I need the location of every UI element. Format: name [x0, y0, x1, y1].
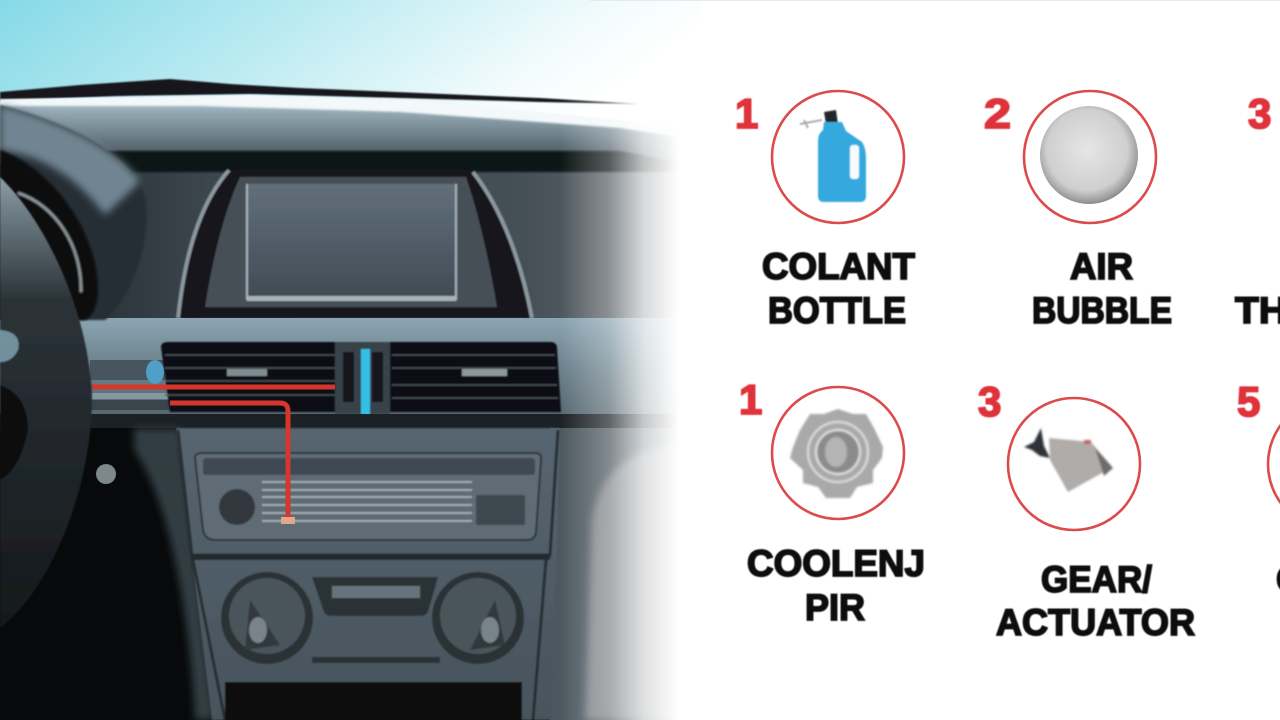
mode button	[476, 495, 525, 525]
item 6: clipped	[1237, 378, 1280, 600]
item 4: coolant pipe	[739, 376, 925, 628]
number 1: 1	[735, 90, 758, 137]
control panel	[195, 453, 541, 540]
label: COLANT	[762, 246, 915, 287]
dark recess band	[100, 151, 680, 172]
lower divider	[192, 555, 550, 560]
label: GEAR/	[1041, 559, 1152, 600]
number 2: 2	[984, 90, 1011, 137]
label: COOLENJ	[747, 543, 925, 584]
steering wheel	[0, 177, 92, 628]
red coolant lines	[92, 387, 335, 524]
label line 2: BOTTLE	[768, 290, 906, 331]
gauge dial	[0, 150, 98, 320]
number 1: 1	[739, 376, 762, 423]
middle vent band	[0, 318, 700, 418]
circle ring	[772, 91, 904, 223]
icon: coolant bottle	[800, 110, 866, 202]
ventilation slats	[262, 482, 472, 521]
center switch	[312, 577, 438, 616]
number 3: 3	[978, 378, 1001, 425]
left dash trim	[90, 360, 170, 410]
storage tray	[225, 682, 522, 720]
number 5: 5	[1237, 378, 1260, 425]
item 5: gear actuator	[978, 378, 1195, 643]
pale dash edge	[0, 95, 700, 140]
icon: metal gear part	[790, 409, 883, 498]
icon: bubble	[1040, 106, 1138, 204]
label line 2: BUBBLE	[1032, 290, 1172, 331]
stalk knob	[96, 464, 116, 484]
blue coolant indicator	[361, 349, 370, 415]
sky through windshield	[0, 0, 700, 130]
icon: actuator	[1024, 428, 1113, 492]
circle ring	[1024, 91, 1156, 223]
screen hood	[176, 170, 533, 318]
item 2: air bubble	[984, 90, 1172, 331]
white fade to background	[560, 90, 700, 720]
left console flank	[134, 428, 215, 720]
right dial	[432, 572, 524, 664]
instrument cluster hood	[0, 105, 147, 320]
hood highlight	[0, 105, 140, 215]
item 1: coolant bottle	[735, 90, 915, 331]
label: AIR	[1070, 246, 1133, 287]
circle ring	[772, 387, 904, 519]
item 3: clipped	[1235, 90, 1280, 331]
blue marker	[146, 360, 164, 384]
right side trim	[550, 428, 700, 720]
lower screen panel	[0, 165, 700, 320]
display screen	[247, 184, 456, 301]
temperature knob	[219, 489, 255, 525]
lower left dark footwell	[0, 428, 700, 720]
upper dash surface	[0, 106, 700, 172]
left dial	[221, 572, 313, 664]
label line 2: ACTUATOR	[996, 602, 1195, 643]
circle ring	[1008, 398, 1140, 530]
label line 2: PIR	[805, 587, 865, 628]
center vent clip	[335, 342, 390, 414]
climate console	[176, 428, 560, 720]
air vents	[161, 342, 561, 415]
circle ring	[1268, 398, 1280, 530]
number 3: 3	[1248, 90, 1271, 137]
dark ledge	[0, 414, 700, 428]
windshield wiper line	[0, 79, 640, 104]
